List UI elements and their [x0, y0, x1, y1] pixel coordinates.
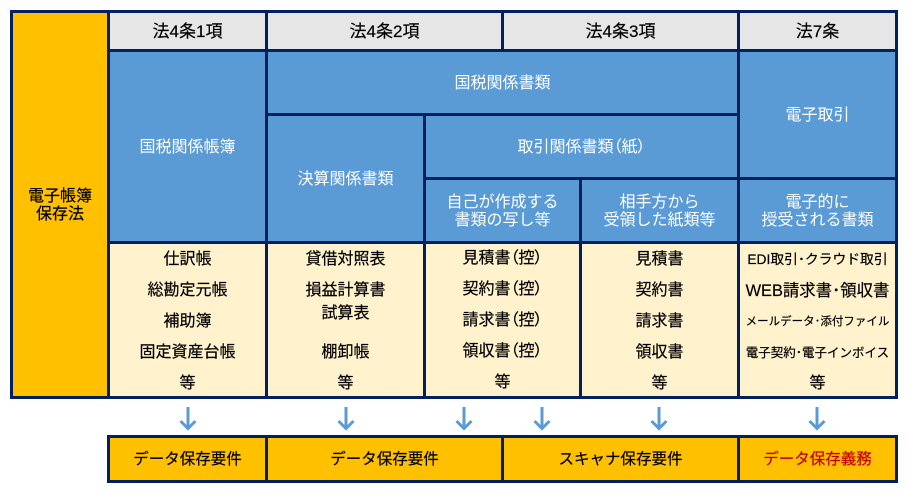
- category: 取引関係書類(紙): 取引関係書類（紙）: [517, 138, 646, 156]
- list: 自己作成の写し: 領収書（控）: [462, 343, 542, 360]
- category: 国税関係書類: [268, 52, 737, 113]
- list: 決算関係書類: 貸借対照表: [305, 251, 386, 268]
- row label: 電子帳簿保存法: 保存法: [36, 206, 84, 222]
- category: 国税関係書類: 国税関係書類: [454, 74, 550, 92]
- requirement: データ保存要件 (法4条2項): [268, 438, 501, 480]
- list: 電子取引: 電子契約･電子インボイス: [746, 346, 889, 360]
- header: 法7条: 法7条: [796, 22, 839, 41]
- list: 決算関係書類: 棚卸帳: [321, 344, 370, 361]
- list: 決算関係書類: [268, 244, 423, 396]
- category: 取引関係書類(紙): [426, 116, 737, 177]
- requirement: データ保存義務: データ保存義務: [763, 451, 872, 468]
- main table: [10, 10, 898, 399]
- arrow 2: [338, 407, 354, 430]
- requirement: データ保存義務: [740, 438, 895, 480]
- category: 電子取引: [740, 52, 895, 177]
- category: 相手方から受領した紙類等: 受領した紙類等: [603, 212, 716, 228]
- list: 帳簿: 固定資産台帳: [139, 344, 236, 361]
- header: 法4条1項: [110, 13, 265, 49]
- list: 電子取引: WEB請求書･領収書: [746, 282, 889, 300]
- list: 帳簿: [110, 244, 265, 396]
- list: 電子取引: [740, 244, 895, 396]
- requirement: データ保存要件 (法4条2項): データ保存要件: [330, 451, 439, 468]
- arrow 3: [456, 407, 472, 430]
- header: 法4条2項: [268, 13, 501, 49]
- requirement: データ保存要件 (法4条1項): [110, 438, 265, 480]
- list: 受領した紙類: 請求書: [635, 313, 684, 330]
- list: 自己作成の写し: 等: [494, 374, 510, 391]
- row label: 電子帳簿保存法: 電子帳簿: [28, 188, 92, 204]
- list: 帳簿: 総勘定元帳: [147, 282, 228, 299]
- requirement: スキャナ保存要件: [504, 438, 737, 480]
- category: 自己が作成する書類の写し等: 自己が作成する: [446, 194, 558, 210]
- list: 受領した紙類: 契約書: [635, 282, 684, 299]
- list: 帳簿: 補助簿: [163, 313, 212, 330]
- requirement: スキャナ保存要件: スキャナ保存要件: [558, 451, 682, 468]
- category: 自己が作成する書類の写し等: [426, 180, 579, 241]
- category: 電子的に授受される書類: [740, 180, 895, 241]
- list: 決算関係書類: 等: [337, 375, 354, 392]
- row label: 電子帳簿保存法: [13, 13, 107, 396]
- arrow 6: [808, 407, 826, 430]
- list: 自己作成の写し: [426, 244, 579, 396]
- list: 受領した紙類: 等: [651, 375, 668, 392]
- category: 電子取引: 電子取引: [785, 106, 850, 124]
- requirement: データ保存要件 (法4条1項): データ保存要件: [133, 451, 242, 468]
- list: 帳簿: 等: [179, 375, 196, 392]
- category: 相手方から受領した紙類等: [582, 180, 737, 241]
- category: 電子的に授受される書類: 電子的に: [785, 194, 850, 210]
- header: 法4条1項: 法4条1項: [153, 22, 222, 41]
- category: 決算関係書類: 決算関係書類: [297, 170, 394, 188]
- list: 決算関係書類: 試算表: [321, 305, 370, 322]
- list: 電子取引: 等: [809, 375, 826, 392]
- arrow 1: [180, 407, 196, 430]
- list: 受領した紙類: 領収書: [635, 344, 684, 361]
- list: 電子取引: メールデータ･添付ファイル: [746, 316, 889, 328]
- list: 自己作成の写し: 見積書（控）: [462, 250, 542, 267]
- header: 法4条3項: 法4条3項: [586, 22, 655, 41]
- list: 受領した紙類: [582, 244, 737, 396]
- list: 自己作成の写し: 請求書（控）: [462, 312, 542, 329]
- list: 帳簿: 仕訳帳: [163, 251, 212, 268]
- list: 決算関係書類: 損益計算書: [305, 282, 386, 299]
- category: 国税関係帳簿: [110, 52, 265, 241]
- header: 法4条3項: [504, 13, 737, 49]
- category: 国税関係帳簿: 国税関係帳簿: [139, 138, 236, 156]
- list: 受領した紙類: 見積書: [635, 251, 684, 268]
- list: 電子取引: EDI取引･クラウド取引: [747, 252, 888, 267]
- header: 法4条2項: 法4条2項: [350, 22, 419, 41]
- list: 自己作成の写し: 契約書（控）: [462, 281, 542, 298]
- arrow 5: [650, 407, 668, 430]
- category: 決算関係書類: [268, 116, 423, 241]
- category: 電子的に授受される書類: 授受される書類: [761, 212, 874, 228]
- category: 相手方から受領した紙類等: 相手方から: [619, 194, 700, 210]
- arrow 4: [534, 407, 550, 430]
- header: 法7条: [740, 13, 895, 49]
- category: 自己が作成する書類の写し等: 書類の写し等: [454, 212, 550, 228]
- requirements row: [107, 435, 898, 483]
